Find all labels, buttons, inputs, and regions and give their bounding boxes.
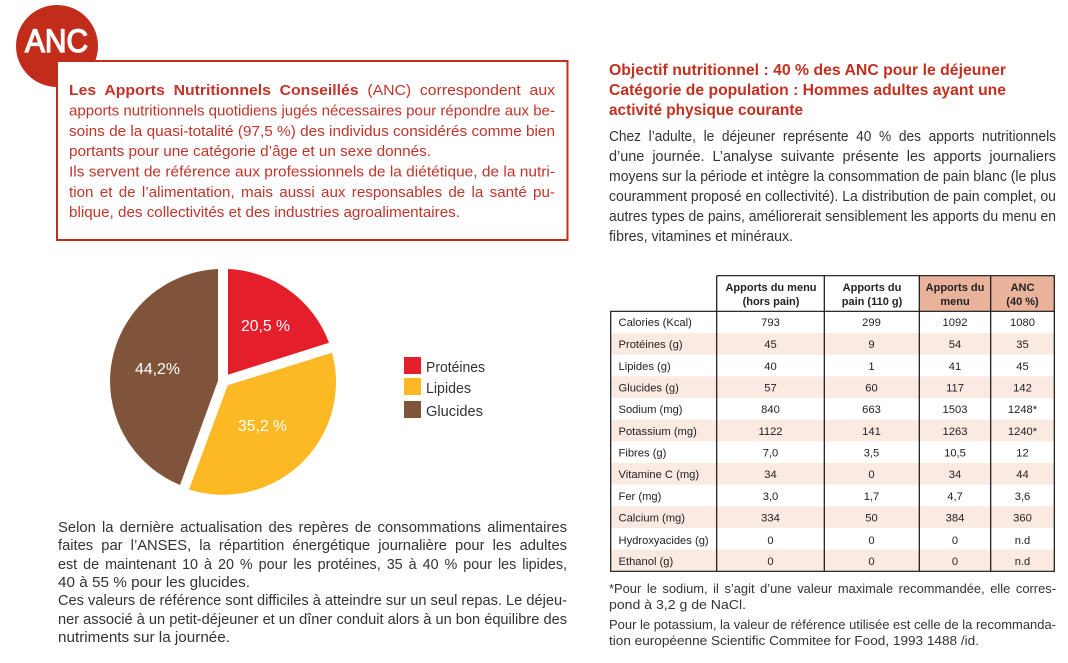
legend — [404, 357, 485, 420]
table header: ANC — [1011, 282, 1034, 294]
table rows: Calories (Kcal) — [618, 317, 692, 329]
text block: ANSES recommendations: Selon la dernière actualisation des repères de consommations alimentaires — [58, 520, 567, 536]
table rows: 1503 — [943, 404, 967, 416]
table rows: 360 — [1013, 512, 1032, 524]
text block: ANC definition: blique, des collectivités et des industries agroalimentaires. — [69, 205, 460, 221]
text block: ANC definition — [69, 83, 556, 221]
table header: Apports du — [843, 282, 901, 294]
table rows: n.d — [1015, 556, 1030, 568]
table header: Apports du menu — [725, 282, 817, 294]
table rows: 57 — [764, 382, 777, 394]
badge: ANC: ANC — [25, 23, 88, 59]
table rows: Hydroxyacides (g) — [618, 535, 709, 547]
table rows: 45 — [1016, 361, 1029, 373]
table rows: 1092 — [943, 317, 967, 329]
footnotes: *Pour le sodium, il s’agit d’une valeur maximale recommandée, elle corres- — [609, 581, 1056, 596]
text block: ANSES recommendations: 40 à 55 % pour les glucides. — [58, 575, 250, 591]
table rows: 663 — [862, 404, 881, 416]
table header: pain (110 g) — [842, 296, 903, 308]
text block: ANSES recommendations — [58, 520, 567, 646]
text block: ANSES recommendations: nutriments sur la journée. — [58, 630, 230, 646]
table rows: 334 — [761, 512, 780, 524]
table rows: Calcium (mg) — [618, 512, 685, 524]
table header: (40 %) — [1006, 296, 1039, 308]
label: 35,2 %: 35,2 % — [238, 418, 287, 435]
table header: menu — [940, 296, 970, 308]
footnotes: pond à 3,2 g de NaCl. — [609, 597, 746, 612]
text block: ANSES recommendations: faites par l’ANSES, la répartition énergétique journalière pour les adultes — [58, 538, 567, 554]
text block: ANC definition: tion et de l’alimentation, mais aussi aux responsables de la santé pu- — [69, 185, 555, 201]
table rows: 10,5 — [944, 448, 966, 460]
table rows: Ethanol (g) — [618, 556, 673, 568]
table rows: 3,6 — [1015, 491, 1030, 503]
text block: ANSES recommendations: ner associé à un petit-déjeuner et un dîner conduit alors à un bon équilibre des — [58, 612, 567, 628]
table rows: 9 — [868, 339, 875, 351]
table rows: Potassium (mg) — [618, 426, 697, 438]
table rows: 0 — [868, 469, 875, 481]
table rows: 142 — [1013, 382, 1032, 394]
table header: Apports du — [926, 282, 984, 294]
pie chart: energy distribution — [110, 269, 336, 495]
table rows: 793 — [761, 317, 780, 329]
table rows: 60 — [865, 382, 878, 394]
table rows: 7,0 — [763, 448, 778, 460]
table: nutrient intake — [611, 276, 1054, 571]
table rows: 1248* — [1008, 404, 1038, 416]
text block: lunch analysis: Chez l’adulte, le déjeuner représente 40 % des apports nutritionnels — [609, 129, 1056, 145]
legend: Lipides — [426, 380, 471, 397]
table rows: Glucides (g) — [618, 382, 679, 394]
text block: ANSES recommendations: est de maintenant 10 à 20 % pour les protéines, 35 à 40 % pour les lipides, — [58, 557, 567, 573]
table rows: Vitamine C (mg) — [618, 469, 699, 481]
text block: ANC definition: Les Apports Nutritionnels Conseillés (ANC) correspondent aux — [69, 83, 556, 99]
table rows: 117 — [946, 382, 964, 394]
table rows: Sodium (mg) — [618, 404, 683, 416]
heading: nutritional objective: Objectif nutritionnel : 40 % des ANC pour le déjeuner — [609, 62, 1006, 79]
table rows: 34 — [949, 469, 961, 481]
table rows: Protéines (g) — [618, 339, 683, 351]
table rows: Fibres (g) — [618, 448, 667, 460]
table rows: 3,0 — [763, 491, 778, 503]
heading: nutritional objective — [609, 62, 1006, 119]
footnotes: Pour le potassium, la valeur de référence utilisée est celle de la recommanda- — [609, 617, 1056, 632]
table rows: 3,5 — [864, 448, 879, 460]
text block: lunch analysis: fibres, vitamines et minéraux. — [609, 229, 793, 245]
text block: lunch analysis: moyens sur la période et intègre la consommation de pain blanc (le plus — [609, 169, 1056, 185]
text block: lunch analysis: couramment proposé en collectivité). La distribution de pain complet, ou — [609, 189, 1056, 205]
table rows: 0 — [868, 556, 875, 568]
table rows: 0 — [767, 535, 774, 547]
table rows: 44 — [1016, 469, 1029, 481]
legend: Glucides — [426, 403, 483, 420]
table rows: 1080 — [1010, 317, 1035, 329]
table rows: 4,7 — [947, 491, 963, 503]
table rows: 12 — [1016, 448, 1029, 460]
table rows: 0 — [952, 556, 958, 568]
table rows: 840 — [761, 404, 780, 416]
table rows: 35 — [1016, 339, 1029, 351]
legend: Protéines — [426, 359, 485, 376]
text block: lunch analysis: d’une journée. L’analyse suivante présente les apports journaliers — [609, 149, 1056, 165]
label: 44,2%: 44,2% — [135, 361, 180, 378]
table rows: 0 — [868, 535, 875, 547]
text block: lunch analysis — [609, 129, 1056, 245]
panel: ANC definition — [57, 61, 568, 240]
table header — [725, 282, 1039, 308]
heading: nutritional objective: activité physique courante — [609, 102, 803, 119]
footnotes: tion européenne Scientific Commitee for Food, 1993 1488 /id. — [609, 633, 979, 648]
table rows: 1263 — [943, 426, 967, 438]
table rows: n.d — [1015, 535, 1030, 547]
text block: ANC definition: portants pour une catégorie d’âge et un sexe donnés. — [69, 144, 431, 160]
table rows — [618, 317, 1038, 568]
table rows: 45 — [764, 339, 777, 351]
table header: (hors pain) — [743, 296, 800, 308]
badge: ANC — [16, 5, 98, 87]
table rows: 54 — [949, 339, 961, 351]
table rows: Fer (mg) — [618, 491, 662, 503]
table rows: 384 — [946, 512, 964, 524]
slice: glucides — [110, 269, 218, 485]
slice: lipides — [189, 353, 336, 495]
text block: ANC definition: Ils servent de référence aux professionnels de la diététique, de la nutri- — [69, 164, 555, 180]
table rows: 0 — [952, 535, 958, 547]
text block: lunch analysis: autres types de pains, améliorerait sensiblement les apports du menu en — [609, 209, 1056, 225]
label: 20,5 %: 20,5 % — [241, 318, 290, 335]
footnotes — [609, 581, 1056, 648]
table rows: 40 — [764, 361, 777, 373]
table rows: Lipides (g) — [618, 361, 671, 373]
table rows: 50 — [865, 512, 878, 524]
slice: protéines — [228, 269, 329, 375]
table rows: 1122 — [758, 426, 783, 438]
table rows: 1,7 — [864, 491, 879, 503]
text block: ANC definition: apports nutritionnels quotidiens jugés nécessaires pour répondre aux be- — [69, 104, 555, 120]
table rows: 1 — [868, 361, 875, 373]
table rows: 141 — [862, 426, 881, 438]
heading: nutritional objective: Catégorie de population : Hommes adultes ayant une — [609, 82, 1006, 99]
table rows: 1240* — [1008, 426, 1038, 438]
text block: ANC definition: soins de la quasi-totalité (97,5 %) des individus considérés comme bien — [69, 124, 555, 140]
text block: ANSES recommendations: Ces valeurs de référence sont difficiles à atteindre sur un seul repas. Le déjeu- — [58, 593, 567, 609]
table rows: 299 — [862, 317, 881, 329]
table rows: 41 — [949, 361, 961, 373]
table rows: 34 — [764, 469, 777, 481]
table rows: 0 — [767, 556, 774, 568]
